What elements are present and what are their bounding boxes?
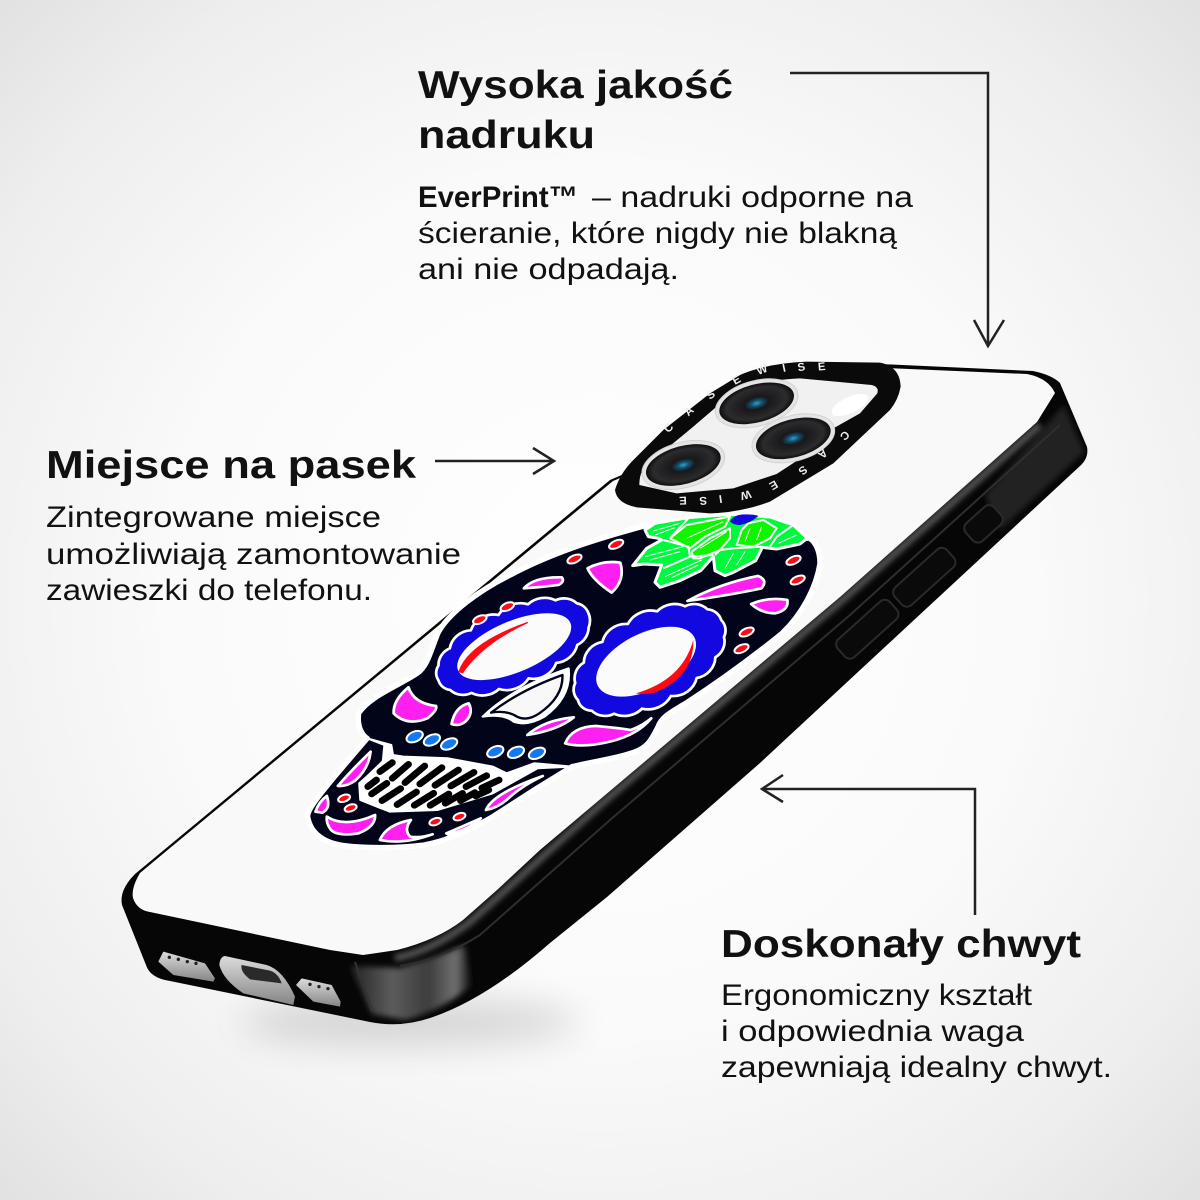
body text: zawieszki do telefonu. (46, 574, 372, 607)
skull silhouette (308, 525, 820, 848)
body text: Zintegrowane miejsce (46, 501, 381, 534)
body text: umożliwiają zamontowanie (46, 538, 461, 571)
body text: ścieranie, które nigdy nie blakną (418, 217, 897, 250)
heading: Wysoka jakość (418, 64, 733, 107)
bottom ports (158, 952, 341, 1007)
callout: strap slot (46, 444, 461, 607)
arrow: strap slot (435, 448, 554, 474)
callout: print quality (418, 64, 913, 286)
flower center (730, 514, 758, 525)
petal veins (645, 522, 797, 578)
left eye (436, 598, 590, 695)
body text (46, 501, 461, 607)
heading (418, 64, 733, 157)
phone shadow (240, 998, 580, 1046)
body text: zapewniają idealny chwyt. (721, 1051, 1112, 1084)
nose (483, 668, 569, 723)
body text: ani nie odpadają. (418, 253, 679, 286)
red dots (337, 538, 806, 827)
camera frame (615, 362, 901, 513)
right eye (574, 604, 726, 716)
side reflections (350, 405, 1084, 1020)
heading: Miejsce na pasek (46, 444, 416, 487)
heading: Doskonały chwyt (721, 923, 1081, 966)
case body (122, 364, 1087, 1024)
petal separators (663, 518, 793, 568)
brand lettering: E (767, 477, 779, 492)
camera island (615, 361, 901, 513)
brand lettering: A (815, 446, 829, 460)
inner bright petals (670, 517, 777, 558)
flash (828, 389, 871, 421)
flower (633, 514, 807, 587)
body text (721, 979, 1112, 1084)
back face (133, 368, 1055, 955)
camera window (639, 378, 878, 493)
heading: nadruku (418, 114, 595, 157)
lenses (637, 370, 840, 498)
brand lettering: E (730, 373, 743, 388)
speaker right (296, 978, 341, 1007)
body text (418, 181, 913, 286)
brand lettering: E (679, 494, 687, 506)
brand lettering: S (698, 494, 707, 506)
arrow: grip (762, 775, 975, 915)
magenta petals (315, 562, 788, 842)
brand lettering: S (797, 361, 807, 374)
brand lettering (662, 361, 851, 506)
charging port (219, 956, 295, 1005)
speaker left (158, 952, 215, 982)
brand lettering: C (837, 428, 851, 442)
callout: grip (721, 923, 1112, 1084)
arrow: top callout to phone corner (790, 73, 1004, 346)
blue dots (405, 729, 547, 761)
brand lettering: S (795, 463, 809, 477)
body text: Ergonomiczny kształt (721, 979, 1033, 1012)
brand lettering: I (781, 363, 787, 375)
brand lettering: C (662, 421, 676, 435)
brand lettering: W (755, 363, 770, 378)
brand lettering: E (818, 361, 827, 374)
teeth (359, 738, 572, 812)
body text: EverPrint™ (418, 181, 578, 214)
phone case (122, 361, 1087, 1024)
sugar skull print (308, 525, 820, 848)
brand lettering: S (704, 388, 718, 402)
body text: i odpowiednia waga (721, 1015, 1024, 1048)
body text: – nadruki odporne na (592, 181, 913, 214)
side buttons (833, 502, 1006, 662)
brand lettering: W (739, 487, 752, 502)
flower base (633, 514, 807, 587)
brand lettering: I (718, 492, 723, 504)
brand lettering: A (682, 404, 696, 419)
